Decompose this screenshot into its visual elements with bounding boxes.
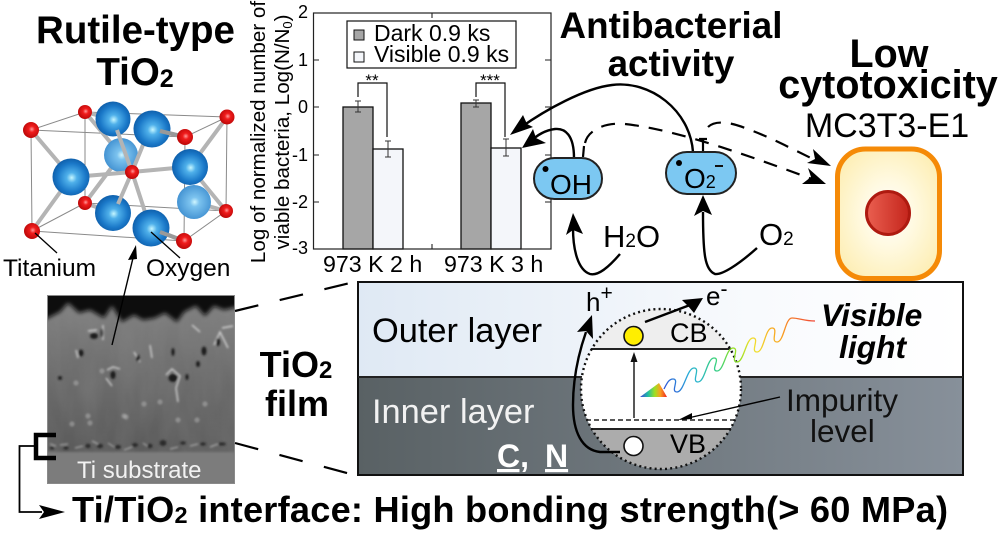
y tick labels: 1 [298, 50, 308, 70]
label: Visible light [821, 297, 922, 365]
arrow: hole to h+ [573, 315, 620, 452]
y tick labels: -2 [292, 192, 308, 212]
legend [347, 20, 516, 68]
band diagram: CB [670, 318, 708, 348]
electron [624, 326, 643, 346]
x tick labels: 973 K 2 h [323, 251, 422, 277]
bar chart: viable bacteria: *** [480, 71, 500, 90]
band diagram: VB [670, 429, 706, 459]
panel: film layers: Inner layer [372, 393, 534, 431]
outer layer [358, 283, 963, 377]
heading: interface bonding strength: interface: High bonding strength(> 60 MPa) [188, 489, 948, 530]
heading: Antibacterial activity: Antibacterial [560, 5, 782, 46]
y tick labels: -1 [292, 145, 308, 165]
x tick labels [323, 251, 543, 277]
inner layer [358, 377, 963, 475]
interface bracket and arrow [20, 435, 65, 519]
band diagram [580, 305, 745, 474]
arrow: hydroxyl to bar [522, 129, 574, 158]
y axis title [247, 1, 295, 263]
heading: interface bonding strength: Ti/TiO [72, 489, 174, 530]
radical: hydroxyl: OH [550, 169, 592, 200]
label: Impurity level: level [810, 413, 875, 449]
label: h+: h [586, 287, 600, 317]
zoom lines: SEM to layer panel [235, 281, 358, 476]
title: Rutile-type TiO2: TiO [96, 51, 160, 94]
SEM micrograph: TiO2 film cross-section [47, 295, 235, 484]
legend: Dark 0.9 ks [374, 20, 490, 46]
significance brackets [358, 83, 505, 137]
title: Rutile-type TiO2: Rutile-type [36, 9, 235, 52]
label: e-: - [720, 278, 727, 301]
arrow: H2O to hydroxyl [566, 213, 620, 274]
panel: film layers: N [545, 438, 568, 474]
crystal structure: rutile unit cell [23, 102, 234, 249]
bar chart: viable bacteria [247, 1, 551, 277]
bars [343, 103, 521, 249]
label: e-: e [706, 281, 720, 311]
heading: Low cytotoxicity: Low [850, 32, 929, 76]
label: O2: O2 [759, 217, 794, 252]
arrow: superoxide to bar [510, 84, 693, 152]
y tick labels: 0 [298, 97, 308, 117]
label: MC3T3-E1: MC3T3-E1 [805, 107, 969, 145]
title: Rutile-type TiO2 [36, 9, 235, 94]
y axis title: ) [271, 14, 294, 21]
label: Impurity level: Impurity [786, 382, 898, 418]
arrow: impurity level pointer [678, 397, 780, 420]
label: h+: + [600, 282, 613, 305]
y axis title: 0 [280, 21, 295, 29]
label: Titanium: Titanium [3, 255, 96, 282]
y tick labels: 2 [298, 2, 308, 22]
excitation arrow [633, 358, 635, 418]
radical: hydroxyl [534, 158, 602, 200]
y axis title: Log of normalized number of [247, 1, 270, 263]
y axis title: viable bacteria, Log(N/N [271, 29, 294, 250]
arrow: SEM film to crystal [112, 245, 137, 345]
label: Titanium [3, 233, 96, 282]
dopants: C, [497, 438, 529, 474]
light wave: visible light [640, 318, 815, 397]
axes [314, 13, 551, 249]
y tick labels [292, 2, 308, 258]
heading: TiO2 film [260, 344, 332, 424]
label: Visible light: light [839, 329, 908, 365]
heading: TiO2 film: film [265, 383, 329, 424]
heading: TiO2 film: 2 [319, 357, 332, 384]
heading: Low cytotoxicity [778, 32, 998, 107]
arrow: dashed superoxide to cell [699, 123, 831, 166]
heading: TiO2 film: TiO [260, 344, 319, 385]
label: Ti substrate: Ti substrate [77, 457, 202, 484]
arrow: O2 to superoxide [694, 195, 757, 274]
cell: MC3T3-E1 [838, 149, 940, 278]
nucleus [866, 192, 910, 234]
radical: superoxide: O2 [684, 163, 716, 194]
heading: Antibacterial activity [560, 5, 782, 84]
label: Impurity level [786, 382, 898, 449]
arrow: electron to e- [645, 298, 703, 322]
heading: Antibacterial activity: activity [608, 43, 735, 84]
arrow: dashed hydroxyl to cell [583, 124, 826, 184]
legend: Visible 0.9 ks [374, 41, 509, 67]
title: Rutile-type TiO2: 2 [160, 65, 174, 93]
heading: Low cytotoxicity: cytotoxicity [778, 63, 998, 107]
radical: superoxide [666, 152, 736, 194]
error bars [355, 100, 509, 157]
label: H2O: H2O [603, 219, 660, 254]
label: Oxygen: Oxygen [146, 255, 230, 282]
label: Oxygen [146, 232, 230, 282]
hole [624, 436, 643, 456]
label: Visible light: Visible [821, 297, 922, 333]
x tick labels: 973 K 3 h [444, 251, 543, 277]
bar chart: viable bacteria: ** [365, 71, 379, 90]
panel: film layers: Outer layer [372, 312, 542, 350]
heading: interface bonding strength: 2 [175, 502, 188, 528]
panel: film layers [358, 282, 963, 475]
y tick labels: -3 [292, 238, 308, 258]
